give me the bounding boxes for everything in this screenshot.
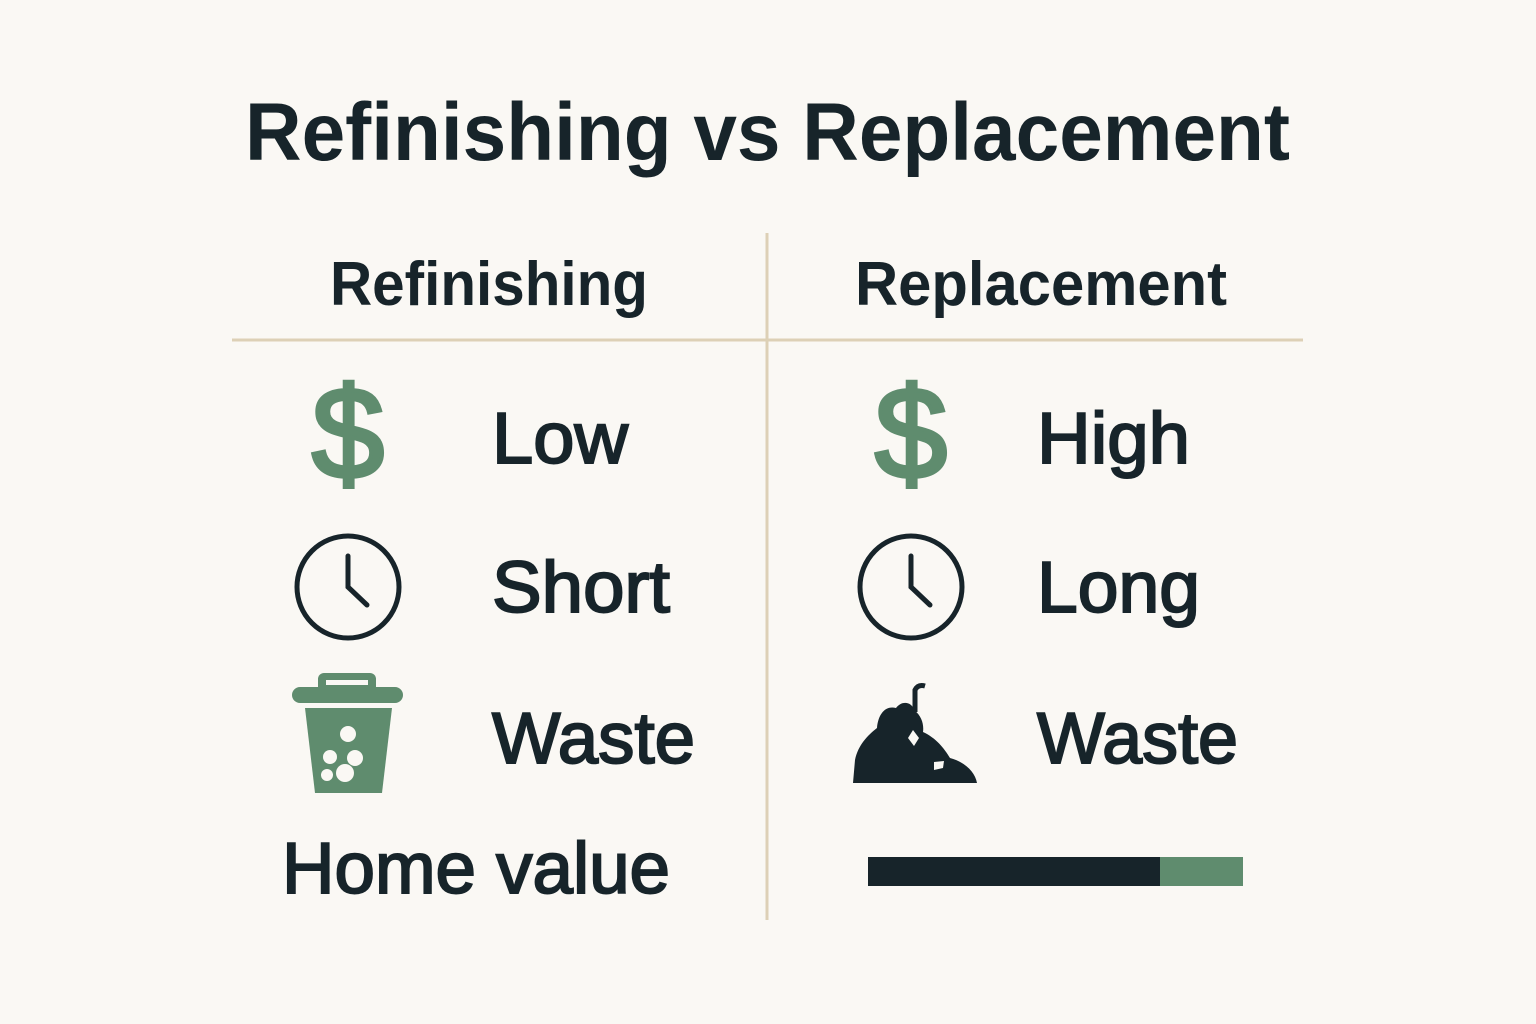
label: Home value: Home value bbox=[282, 829, 670, 909]
icon: waste pile bbox=[853, 686, 977, 783]
label: Low: Low bbox=[492, 399, 629, 479]
icon: clock right bbox=[860, 536, 962, 638]
label: Short: Short bbox=[492, 548, 670, 628]
title: Refinishing vs Replacement bbox=[245, 87, 1290, 178]
icon: dollar left: $ bbox=[312, 360, 384, 506]
label: Waste left: Waste bbox=[492, 699, 695, 779]
column heading: Refinishing: Refinishing bbox=[330, 250, 648, 319]
bar: home value bbox=[868, 857, 1243, 886]
column heading: Replacement: Replacement bbox=[855, 250, 1227, 319]
label: Long: Long bbox=[1037, 548, 1200, 628]
icon: trash bin bbox=[292, 673, 403, 793]
label: Waste right: Waste bbox=[1037, 699, 1238, 779]
icon: dollar right: $ bbox=[875, 360, 947, 506]
label: High: High bbox=[1037, 399, 1190, 479]
icon: clock left bbox=[297, 536, 399, 638]
